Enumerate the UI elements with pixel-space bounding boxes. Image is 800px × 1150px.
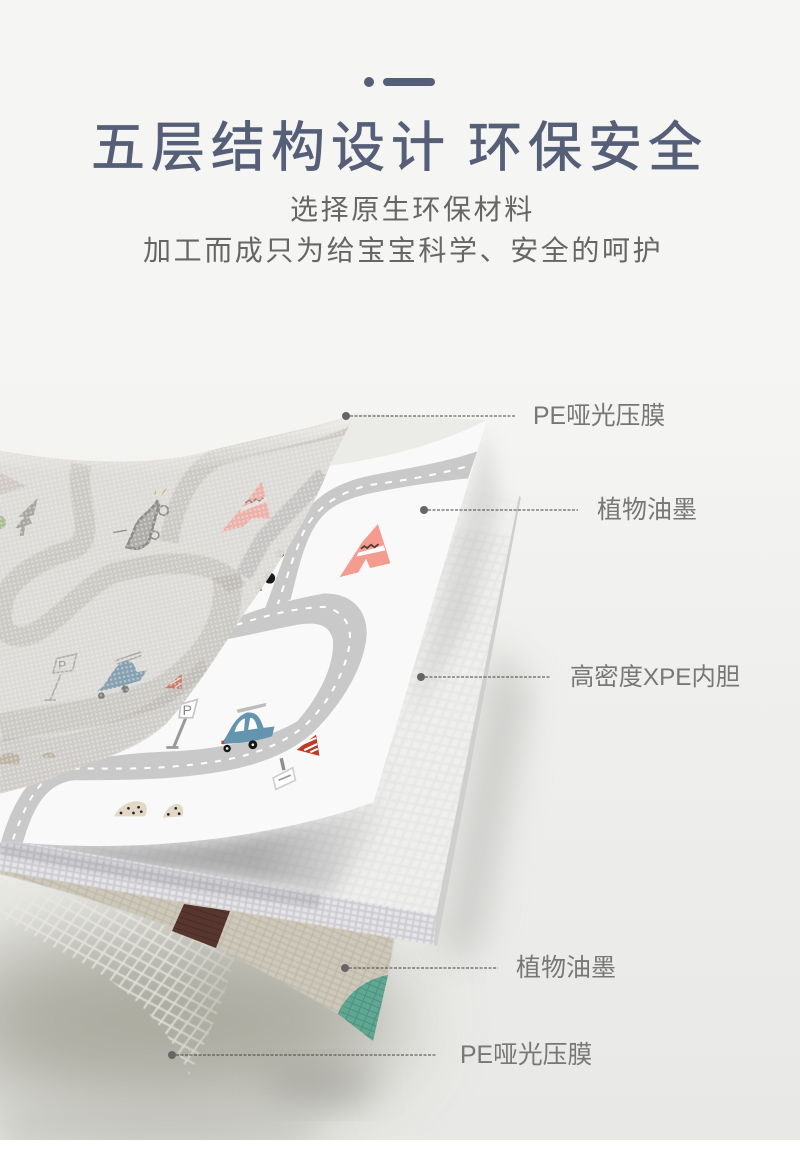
decoration: dot and bar (364, 77, 435, 87)
foam top surface (0, 490, 519, 915)
subtitle: 选择原生环保材料 (290, 194, 535, 225)
brown square pattern (172, 904, 230, 948)
bottom layer: PE matte film net (14, 900, 234, 1074)
callout: PE film bottom: PE哑光压膜 (460, 1041, 592, 1069)
ghost P sign (45, 654, 76, 700)
ghost roads (0, 424, 352, 728)
haze of film behind top edge (329, 413, 486, 466)
ghost lower shade (0, 657, 210, 794)
callout: plant ink bottom (341, 954, 616, 982)
ghost triangle top-left (0, 473, 27, 495)
upper road (262, 451, 477, 616)
shadow cast by printed sheet (0, 720, 395, 895)
callout: XPE core: 高密度XPE内胆 (570, 664, 740, 691)
icon: blue car (221, 703, 274, 752)
printed road sheet (0, 420, 487, 846)
fade at foam top edge (455, 488, 522, 535)
icon: parking sign: P (183, 703, 192, 719)
subtitle: 加工而成只为给宝宝科学、安全的呵护 (143, 235, 663, 266)
ghost red cone (165, 674, 182, 689)
title: 五层结构设计 (91, 118, 451, 178)
callout: PE film top (342, 402, 665, 430)
title (91, 118, 708, 178)
callout: PE film top: PE哑光压膜 (533, 402, 665, 430)
XPE foam core (0, 430, 522, 946)
film dot texture (0, 420, 346, 794)
ghost rocks (0, 753, 56, 764)
ghost blue car (98, 652, 147, 699)
foam side edge (434, 496, 521, 946)
loop road (0, 593, 367, 846)
top PE matte film (0, 414, 354, 794)
callout: plant ink bottom: 植物油墨 (516, 954, 616, 982)
foam front face (0, 838, 436, 945)
title: 环保安全 (468, 118, 708, 178)
callout: plant ink top: 植物油墨 (597, 496, 697, 524)
ghost tipi (221, 481, 270, 532)
icon: road sign (273, 758, 295, 789)
icon: pink tipi (340, 524, 390, 577)
ghost tree (15, 498, 38, 536)
ghost car (113, 501, 168, 549)
icon: red striped cone (297, 735, 319, 756)
hidden car wheels (256, 549, 284, 591)
icon: parking sign (166, 699, 197, 747)
callout: plant ink top (420, 496, 697, 524)
teal corner pattern (338, 975, 388, 1041)
faded top edge of film (0, 414, 355, 475)
top PE matte film: P (58, 659, 66, 673)
icon: speckled rocks (114, 801, 183, 818)
subtitle (143, 194, 663, 266)
callout: PE film bottom (168, 1041, 592, 1069)
callout: XPE core (417, 664, 740, 691)
bottom layer: printed ink sheet (0, 868, 395, 1041)
